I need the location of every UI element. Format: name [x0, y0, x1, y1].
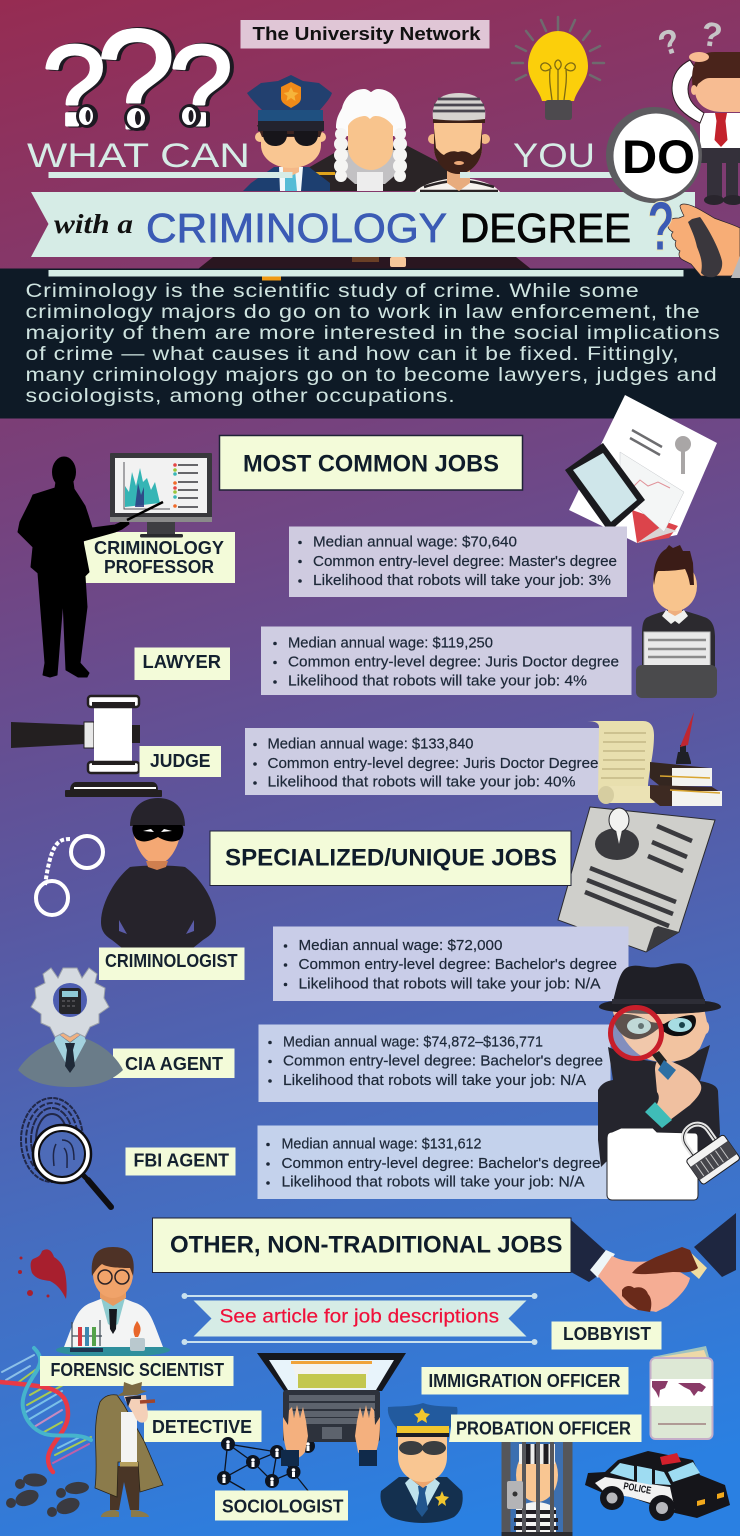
- intro text: majority of them are more interested in the social implications: [26, 322, 720, 344]
- icon: books and ink: [650, 712, 722, 806]
- label: criminology professor: [84, 532, 235, 583]
- panel: fbi facts: [258, 1126, 610, 1199]
- publisher label: [240, 20, 490, 48]
- icon: passport: [650, 1346, 712, 1439]
- publisher label: The University Network: [252, 24, 482, 44]
- banner: see article: See article for job descriptions: [220, 1306, 499, 1328]
- panel: criminologist facts: Common entry-level degree: Bachelor's degree: [298, 956, 617, 973]
- label: criminologist: CRIMINOLOGIST: [105, 951, 238, 971]
- label: forensic scientist: FORENSIC SCIENTIST: [50, 1360, 224, 1380]
- heading: other jobs: OTHER, NON-TRADITIONAL JOBS: [170, 1232, 562, 1258]
- icon: puzzled man: ?: [699, 15, 725, 55]
- label: probation officer: PROBATION OFFICER: [456, 1418, 631, 1438]
- panel: professor facts: Median annual wage: $70,640: [313, 534, 517, 550]
- label: lobbyist: [552, 1322, 662, 1350]
- label: probation officer: [449, 1414, 642, 1442]
- panel: lawyer facts: Likelihood that robots will take your job: 4%: [288, 672, 587, 690]
- intro panel: [0, 268, 740, 418]
- icon: three question marks: ?: [45, 23, 109, 150]
- icon: spy with magnifier: [598, 963, 721, 1167]
- icon: footprints: [6, 1472, 89, 1517]
- divider bars: [48, 172, 613, 178]
- label: fbi agent: [126, 1148, 236, 1176]
- icon: three question marks: ?: [172, 23, 236, 150]
- icon: three question marks: ?: [169, 23, 233, 150]
- label: fbi agent: FBI AGENT: [134, 1150, 229, 1170]
- icon: police car: POLICE: [622, 1481, 652, 1497]
- panel: professor facts: Likelihood that robots will take your job: 3%: [313, 572, 611, 589]
- label: criminology professor: PROFESSOR: [104, 557, 214, 577]
- intro text: [26, 280, 720, 407]
- label: criminologist: [99, 948, 244, 980]
- icon: puzzled man: [654, 15, 740, 205]
- icon: lawyer: [636, 545, 717, 698]
- panel: criminologist facts: Likelihood that robots will take your job: N/A: [298, 976, 600, 992]
- icon: gavel: [11, 696, 162, 797]
- label: cia agent: [113, 1048, 234, 1078]
- icon: handcuffs: [36, 836, 103, 915]
- panel: professor facts: [289, 526, 627, 597]
- icon: masked burglar: [101, 798, 216, 948]
- label: cia agent: CIA AGENT: [125, 1054, 223, 1074]
- icon: monitor with chart: [110, 453, 212, 538]
- icon: magnifier with DO: [606, 107, 702, 203]
- panel: cia facts: Median annual wage: $74,872–$136,771: [283, 1034, 543, 1050]
- label: detective: DETECTIVE: [152, 1417, 252, 1437]
- heading: most common jobs: [220, 436, 522, 490]
- icon: cia agent: [18, 968, 123, 1087]
- panel: judge facts: Likelihood that robots will take your job: 40%: [268, 774, 576, 790]
- divider bar and tab: [48, 270, 684, 280]
- heading: most common jobs: MOST COMMON JOBS: [243, 450, 499, 478]
- icon: three question marks: ?: [97, 0, 175, 158]
- label: sociologist: SOCIOLOGIST: [222, 1496, 344, 1516]
- icon: hand holding magnifier: [668, 204, 740, 278]
- icon: silhouette professor: [18, 457, 163, 677]
- panel: professor facts: Common entry-level degree: Master's degree: [313, 553, 617, 570]
- panel: fbi facts: Likelihood that robots will take your job: N/A: [282, 1174, 584, 1190]
- icon: documents and phone: [565, 395, 717, 543]
- icon: three question marks: ?: [100, 0, 178, 158]
- icon: dna helix: [0, 1348, 91, 1472]
- label: criminology professor: CRIMINOLOGY: [94, 538, 224, 558]
- icon: sociology network: [217, 1437, 315, 1492]
- icon: folder and padlock: [607, 1113, 740, 1200]
- intro text: many criminology majors go on to become lawyers, judges and: [26, 364, 717, 386]
- panel: lawyer facts: Median annual wage: $119,250: [288, 634, 493, 652]
- icon: three question marks: ?: [42, 23, 106, 150]
- icon: fingerprint and magnifier: [21, 1098, 111, 1207]
- icon: blood splatter: [18, 1249, 67, 1299]
- label: forensic scientist: [40, 1356, 234, 1386]
- blue question mark: ?: [647, 188, 675, 265]
- icon: resume document: [558, 807, 715, 952]
- title ribbon: CRIMINOLOGY: [146, 205, 447, 251]
- icon: judge: [305, 89, 462, 191]
- panel: criminologist facts: Median annual wage: $72,000: [298, 937, 502, 954]
- under-banner desk: [198, 257, 531, 269]
- heading: other jobs: [152, 1218, 571, 1272]
- panel: cia facts: [258, 1024, 610, 1102]
- intro text: sociologists, among other occupations.: [26, 385, 456, 407]
- panel: fbi facts: Median annual wage: $131,612: [282, 1136, 482, 1152]
- icon: scroll: [587, 721, 660, 804]
- icon: puzzled man: ?: [654, 21, 685, 64]
- label: immigration officer: IMMIGRATION OFFICER: [428, 1371, 620, 1391]
- intro text: of crime — what causes it and how can it be fixed. Fittingly,: [26, 343, 680, 365]
- icon: police officer: [243, 75, 332, 191]
- label: immigration officer: [422, 1367, 628, 1394]
- icon: detective: [95, 1382, 163, 1517]
- icon: light bulb: [512, 17, 604, 120]
- icon: prisoner: [415, 93, 500, 192]
- label: sociologist: [215, 1490, 348, 1520]
- panel: criminologist facts: [273, 926, 628, 1001]
- label: lawyer: LAWYER: [142, 652, 221, 672]
- title ribbon: [31, 192, 695, 257]
- icon: magnifier with DO: DO: [622, 130, 695, 183]
- title: what can you: [27, 137, 595, 175]
- panel: lawyer facts: Common entry-level degree: Juris Doctor degree: [288, 654, 619, 670]
- intro text: criminology majors do go on to work in law enforcement, the: [26, 301, 700, 323]
- label: judge: JUDGE: [150, 751, 210, 771]
- panel: lawyer facts: [261, 626, 632, 695]
- panel: cia facts: Likelihood that robots will take your job: N/A: [283, 1072, 586, 1089]
- icon: handshake: [571, 1213, 736, 1312]
- panel: judge facts: [245, 728, 605, 795]
- panel: cia facts: Common entry-level degree: Bachelor's degree: [283, 1052, 603, 1070]
- icon: laptop and hands: [257, 1353, 406, 1466]
- title ribbon: with a: [54, 209, 133, 239]
- icon: prisoner behind bars: [502, 1442, 572, 1536]
- title: what can you: WHAT CAN: [27, 137, 250, 175]
- intro text: Criminology is the scientific study of crime. While some: [26, 280, 640, 302]
- icon: police officer: [380, 1403, 463, 1523]
- title ribbon: DEGREE: [460, 205, 631, 251]
- label: judge: [140, 746, 221, 777]
- panel: fbi facts: Common entry-level degree: Bachelor's degree: [282, 1155, 600, 1172]
- panel: judge facts: Common entry-level degree: Juris Doctor Degree: [268, 755, 598, 772]
- heading: specialized jobs: [210, 831, 571, 886]
- icon: forensic scientist: [56, 1247, 170, 1357]
- icon: police car: [585, 1451, 730, 1521]
- label: detective: [144, 1410, 262, 1442]
- banner: see article: [182, 1293, 538, 1345]
- heading: specialized jobs: SPECIALIZED/UNIQUE JOBS: [225, 844, 557, 872]
- title: what can you: YOU: [513, 137, 595, 175]
- label: lawyer: [134, 648, 230, 680]
- icon: three question marks: [42, 0, 236, 158]
- label: lobbyist: LOBBYIST: [563, 1324, 651, 1344]
- panel: judge facts: Median annual wage: $133,840: [268, 736, 474, 752]
